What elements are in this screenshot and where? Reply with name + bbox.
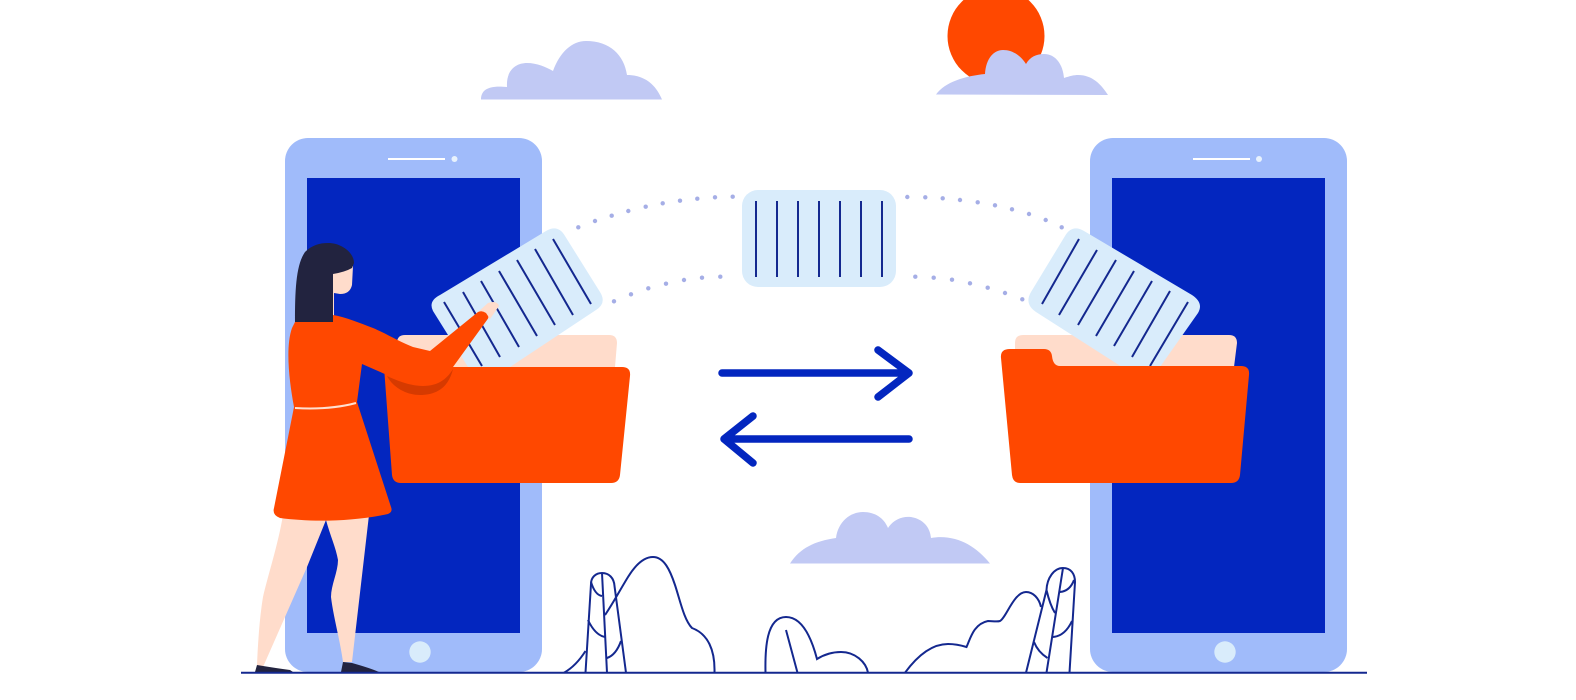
left phone [285, 138, 542, 672]
face [328, 266, 353, 322]
arrow: right [722, 350, 909, 397]
hand [478, 302, 499, 319]
document in transit [742, 190, 896, 287]
left folder [384, 228, 630, 483]
belt [295, 403, 356, 408]
plant: right hill and cactus [905, 568, 1075, 673]
hair [295, 243, 354, 322]
cloud: lower centre [790, 512, 990, 564]
arm shadow [387, 369, 453, 395]
dress [274, 311, 488, 521]
right phone [1090, 138, 1347, 672]
shoes [255, 662, 379, 672]
right folder [1001, 228, 1249, 483]
cloud: top left [481, 41, 662, 100]
arrow: left [724, 416, 909, 463]
ground line [241, 672, 1367, 674]
plant: centre bush [765, 617, 868, 673]
sun [948, 0, 1044, 84]
cloud: in front of sun [936, 50, 1108, 95]
woman [255, 243, 499, 672]
legs [257, 515, 369, 667]
dotted transfer paths [576, 194, 1064, 303]
plant: left cactus and hill [564, 557, 715, 673]
